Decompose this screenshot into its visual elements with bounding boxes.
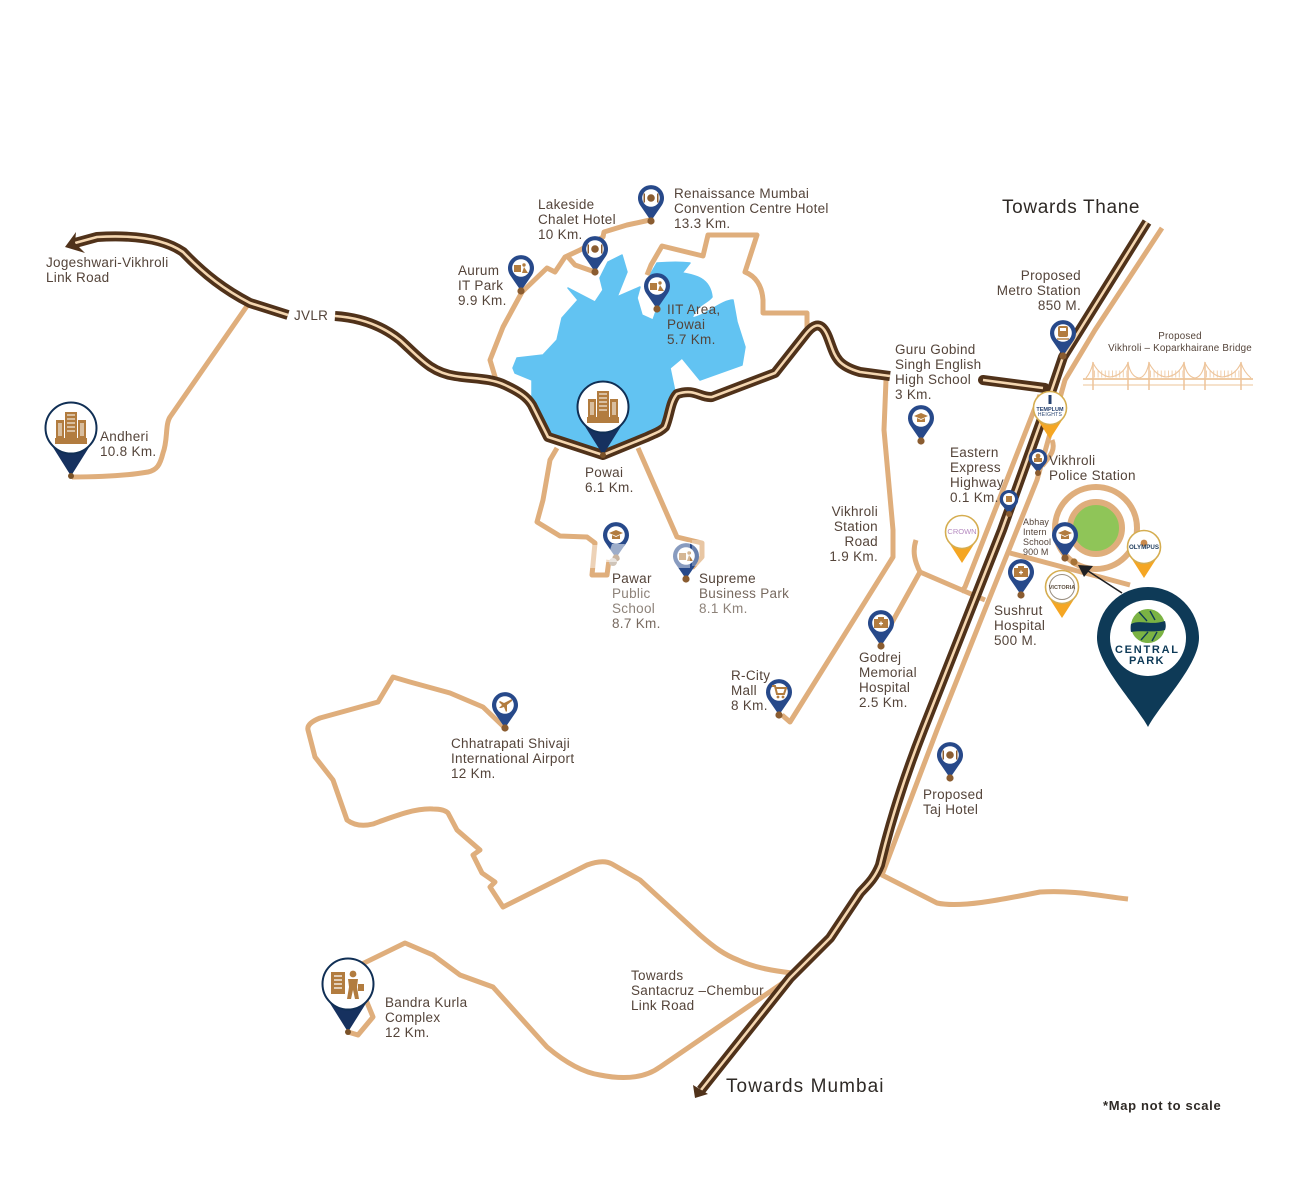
road: Supreme Business Park bbox=[638, 448, 702, 568]
pin: Metro bbox=[1050, 320, 1076, 360]
highway Eastern Express bbox=[693, 222, 1147, 1098]
label: Eastern Express Highway: 0.1 Km. bbox=[950, 490, 999, 505]
label: Police: Police Station bbox=[1049, 468, 1136, 483]
label: Sushrut: Sushrut bbox=[994, 603, 1043, 618]
pin: Pawar bbox=[603, 522, 629, 566]
road: north of lake bbox=[647, 235, 807, 330]
road: airport to highway bbox=[308, 677, 792, 973]
label: Aurum: 9.9 Km. bbox=[458, 293, 507, 308]
label: IIT: 5.7 Km. bbox=[667, 332, 716, 347]
label: Santacruz Chembur: Santacruz –Chembur bbox=[631, 983, 764, 998]
label: Guru Gobind: Guru Gobind bbox=[895, 342, 976, 357]
pin: IIT Area bbox=[644, 273, 670, 313]
pin: Central Park bbox=[1097, 587, 1199, 727]
label: Supreme: 8.1 Km. bbox=[699, 601, 748, 616]
pin: Temple Heights project: TEMPLUM bbox=[1036, 407, 1064, 413]
label: Lakeside: Chalet Hotel bbox=[538, 212, 616, 227]
label: Taj: Proposed bbox=[923, 787, 983, 802]
label: Powai: 6.1 Km. bbox=[585, 480, 634, 495]
pin: Sushrut bbox=[1008, 559, 1034, 599]
label: Bandra Kurla Complex: Complex bbox=[385, 1010, 440, 1025]
label: Taj: Taj Hotel bbox=[923, 802, 978, 817]
pin: Temple Heights project: HEIGHTS bbox=[1038, 412, 1063, 418]
label: IIT: IIT Area, bbox=[667, 302, 720, 317]
heading: Towards Mumbai: Towards Mumbai bbox=[726, 1076, 884, 1097]
label: Godrej: 2.5 Km. bbox=[859, 695, 908, 710]
label: Renaissance: Renaissance Mumbai bbox=[674, 186, 809, 201]
highway JVLR bbox=[65, 232, 1045, 455]
label: Metro: Metro Station bbox=[997, 283, 1081, 298]
label: Bridge: Vikhroli – Koparkhairane Bridge bbox=[1108, 343, 1252, 354]
site marker dot and arrow bbox=[1070, 558, 1122, 593]
label: Jogeshwari-Vikhroli: Jogeshwari-Vikhroli bbox=[46, 255, 168, 270]
label: Powai: Powai bbox=[585, 465, 623, 480]
label: Aurum: IT Park bbox=[458, 278, 503, 293]
road: service road east bbox=[882, 228, 1162, 905]
label: IIT: Powai bbox=[667, 317, 705, 332]
label: Eastern Express Highway: Express bbox=[950, 460, 1001, 475]
label: JVLR: JVLR bbox=[294, 308, 328, 323]
label: Guru Gobind: High School bbox=[895, 372, 971, 387]
label: Godrej: Memorial bbox=[859, 665, 917, 680]
pin: Crown project: CROWN bbox=[947, 527, 977, 536]
pin: Airport bbox=[492, 692, 518, 732]
label: Abhay: Abhay bbox=[1023, 517, 1049, 527]
road: Godrej link bbox=[885, 540, 985, 635]
label: Airport: Chhatrapati Shivaji bbox=[451, 736, 570, 751]
label: Andheri: Andheri bbox=[100, 429, 149, 444]
label: Pawar: School bbox=[612, 601, 655, 616]
road: east-west near site bbox=[1010, 553, 1130, 585]
central park circular roads bbox=[1055, 487, 1137, 569]
label: Vikhroli Station Road: Station bbox=[834, 519, 878, 534]
pin: Olympus project: OLYMPUS bbox=[1129, 544, 1159, 551]
pin: Central Park: PARK bbox=[1129, 655, 1165, 667]
label: Pawar: 8.7 Km. bbox=[612, 616, 661, 631]
road: Vikhroli police link bbox=[1042, 440, 1053, 466]
pin: Renaissance bbox=[638, 185, 664, 225]
road: Andheri bbox=[72, 306, 247, 477]
label: Airport: International Airport bbox=[451, 751, 574, 766]
label: Godrej: Godrej bbox=[859, 650, 901, 665]
label: Vikhroli Station Road: Road bbox=[845, 534, 878, 549]
road: Pawar Public School bbox=[537, 448, 609, 575]
pin: Eastern Express bbox=[1000, 490, 1018, 517]
label: Bandra Kurla Complex: Bandra Kurla bbox=[385, 995, 467, 1010]
label: Godrej: Hospital bbox=[859, 680, 910, 695]
label: Metro: Proposed bbox=[1021, 268, 1081, 283]
label: Pawar: Pawar bbox=[612, 571, 652, 586]
label: Sushrut: Hospital bbox=[994, 618, 1045, 633]
pin: Lakeside bbox=[582, 236, 608, 276]
heading: Towards Thane: Towards Thane bbox=[1002, 197, 1140, 218]
label: Renaissance: 13.3 Km. bbox=[674, 216, 730, 231]
road: service road west bbox=[961, 395, 1040, 592]
label: Eastern Express Highway: Eastern bbox=[950, 445, 999, 460]
label: Guru Gobind: Singh English bbox=[895, 357, 981, 372]
bridge illustration bbox=[1083, 362, 1253, 390]
road: BKC to highway bbox=[360, 943, 787, 1078]
pin: Powai bbox=[578, 382, 628, 458]
label: Vikhroli Station Road: Vikhroli bbox=[832, 504, 878, 519]
note: map not to scale: *Map not to scale bbox=[1103, 1098, 1221, 1113]
label: Abhay: School bbox=[1023, 537, 1051, 547]
pin: Aurum bbox=[508, 255, 534, 295]
pin: Olympus project bbox=[1128, 530, 1160, 578]
label: Eastern Express Highway: Highway bbox=[950, 475, 1004, 490]
pin: Victoria project: VICTORIA bbox=[1049, 585, 1075, 591]
pin: Godrej bbox=[868, 610, 894, 650]
label: Abhay: 900 M bbox=[1023, 547, 1049, 557]
pin: Temple Heights project bbox=[1034, 392, 1066, 439]
pin: Crown project bbox=[946, 516, 978, 563]
label: R-City: R-City bbox=[731, 668, 770, 683]
label: Abhay: Intern bbox=[1023, 527, 1047, 537]
label: Guru Gobind: 3 Km. bbox=[895, 387, 932, 402]
label: Lakeside: 10 Km. bbox=[538, 227, 583, 242]
label: Santacruz Chembur: Link Road bbox=[631, 998, 694, 1013]
road: Vikhroli Station bbox=[782, 380, 893, 722]
pin: Supreme bbox=[673, 543, 699, 583]
label: Jogeshwari-Vikhroli: Link Road bbox=[46, 270, 110, 285]
label: Supreme: Supreme bbox=[699, 571, 756, 586]
label: R-City: Mall bbox=[731, 683, 757, 698]
label: Police: Vikhroli bbox=[1049, 453, 1095, 468]
road: Lakeside branch bbox=[568, 257, 595, 272]
pin: R-City bbox=[766, 679, 792, 719]
lake bbox=[513, 255, 745, 455]
watermark haze bbox=[586, 540, 708, 568]
label: Santacruz Chembur: Towards bbox=[631, 968, 683, 983]
label: Metro: 850 M. bbox=[1038, 298, 1081, 313]
label: Aurum: Aurum bbox=[458, 263, 499, 278]
pin: Central Park: CENTRAL bbox=[1115, 644, 1180, 656]
pin: Taj bbox=[937, 742, 963, 782]
label: Bandra Kurla Complex: 12 Km. bbox=[385, 1025, 430, 1040]
pin: Bandra Kurla Complex bbox=[322, 958, 374, 1035]
label: Supreme: Business Park bbox=[699, 586, 789, 601]
label: R-City: 8 Km. bbox=[731, 698, 768, 713]
label: Andheri: 10.8 Km. bbox=[100, 444, 156, 459]
label: Bridge: Proposed bbox=[1158, 331, 1202, 342]
label: Pawar: Public bbox=[612, 586, 651, 601]
pin: Abhay bbox=[1052, 522, 1078, 562]
label: Sushrut: 500 M. bbox=[994, 633, 1037, 648]
road: BKC loop bbox=[348, 1000, 373, 1035]
tan local roads bbox=[72, 220, 1162, 1078]
label: Lakeside: Lakeside bbox=[538, 197, 594, 212]
label: Renaissance: Convention Centre Hotel bbox=[674, 201, 829, 216]
pin: Victoria project bbox=[1046, 570, 1078, 618]
pin: Police bbox=[1029, 449, 1047, 476]
pin: Guru Gobind school bbox=[908, 405, 934, 445]
road: Aurum, Lakeside, Renaissance bbox=[490, 220, 650, 380]
pin: Andheri bbox=[46, 402, 96, 479]
label: Airport: 12 Km. bbox=[451, 766, 496, 781]
label: Vikhroli Station Road: 1.9 Km. bbox=[829, 549, 878, 564]
